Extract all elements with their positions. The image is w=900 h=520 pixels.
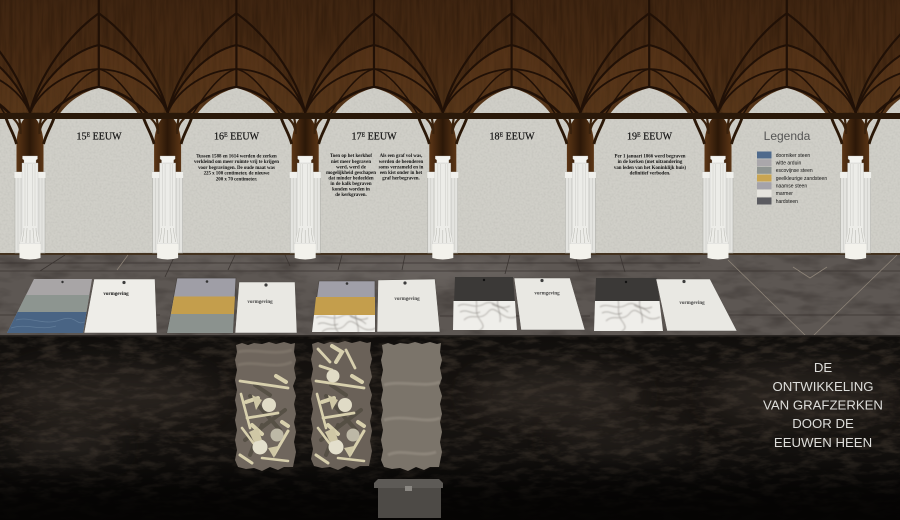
heading: 17e eeuw: E	[361, 132, 365, 138]
text: 17e eeuw left column: dat minder bedeelden	[328, 176, 374, 181]
design sheet 4: vormgeving	[534, 292, 560, 296]
text: 19e eeuw: van leden van het Koninklijk huis)	[614, 166, 686, 171]
legend: hardsteen	[776, 199, 798, 205]
gravestone 4	[453, 277, 518, 332]
soil	[0, 335, 900, 520]
text: 17e eeuw left column: mogelijkheid geschapen	[326, 171, 376, 176]
columns	[14, 156, 871, 260]
gravestone 3	[312, 280, 376, 332]
title: VAN GRAFZERKEN	[763, 398, 883, 412]
gravestone 5	[594, 278, 663, 333]
heading: 17e eeuw: 17	[351, 132, 361, 142]
text: 17e eeuw left column: in de kalk begraven	[330, 182, 372, 187]
wooden vaulted ceiling	[0, 0, 900, 114]
wall background	[0, 80, 900, 255]
heading: 19e eeuw: E	[637, 132, 641, 138]
text: 16e eeuw: Tussen 1588 en 1614 werden de zerken	[196, 154, 277, 160]
roof beam	[0, 113, 900, 119]
text: 16e eeuw: voor begravingen. De oude maat was	[198, 166, 275, 171]
heading: 16e eeuw: 16	[214, 132, 224, 142]
design sheet 2: vormgeving	[247, 300, 273, 305]
text: 16e eeuw: 200 x 70 centimeter.	[216, 177, 257, 182]
text: 19e eeuw: definitief verboden.	[630, 172, 670, 177]
legend	[757, 129, 827, 205]
text: 17e eeuw right column: soms verzameld en in	[379, 165, 424, 170]
design sheet 5	[656, 279, 737, 331]
text: 17e eeuw right column: graf herbegraven.	[382, 176, 420, 181]
legend: naamse steen	[776, 183, 807, 189]
heading: 17e eeuw: EEUW	[365, 132, 397, 142]
text: 19e eeuw: Per 1 januari 1866 werd begraven	[615, 154, 686, 160]
text: 19e eeuw: in de kerken (met uitzondering	[618, 160, 683, 165]
legend: marmer	[776, 191, 793, 197]
design sheet 1	[84, 279, 157, 333]
title: DE	[814, 360, 832, 375]
legend: doorniker steen	[776, 153, 810, 159]
text: 16e eeuw: verkleind om meer ruimte vrij te krijgen	[194, 160, 279, 165]
text: 17e eeuw right column: Als een graf vol was,	[380, 154, 423, 159]
title: ONTWIKKELING	[772, 379, 874, 394]
heading: 15e eeuw: EEUW	[90, 132, 122, 142]
floor	[0, 253, 900, 337]
title: EEUWEN HEEN	[774, 435, 872, 450]
design sheet 2	[235, 282, 297, 333]
grave 3 filled with soil	[381, 342, 442, 471]
heading: 18e eeuw: 18	[489, 132, 499, 142]
design sheet 3: vormgeving	[394, 297, 420, 302]
text: 17e eeuw left column: werd, werd de	[336, 165, 367, 170]
text: 17e eeuw left column: Toen op het kerkhof	[330, 154, 372, 159]
design sheet 4	[514, 278, 585, 330]
design sheet 3	[377, 279, 440, 332]
text: 17e eeuw left column: de kerkgraven.	[335, 193, 367, 198]
heading: 19e eeuw: EEUW	[641, 132, 673, 142]
legend: witte arduin	[776, 160, 801, 166]
heading: 16e eeuw: E	[224, 132, 228, 138]
grave 1 with bones	[235, 342, 296, 471]
design sheet 1: vormgeving	[103, 292, 129, 297]
legend: geelkleurige zandsteen	[776, 176, 827, 182]
gravestone 2	[167, 278, 236, 333]
ossuary box	[374, 479, 443, 518]
text: 17e eeuw left column: konden worden in	[332, 188, 370, 192]
grave 2 with bones	[311, 341, 372, 470]
piers and brackets	[6, 118, 880, 173]
legend: escovijnse steen	[776, 168, 813, 174]
title: DOOR DE	[792, 416, 854, 431]
legend: Legenda	[764, 129, 811, 143]
wall texture	[0, 88, 900, 253]
text: 17e eeuw right column: werden de beenderen	[379, 160, 424, 165]
text: 17e eeuw left column: niet meer begraven	[331, 160, 371, 165]
heading: 18e eeuw: E	[499, 132, 503, 138]
text: 17e eeuw right column: een kist onder in het	[380, 171, 423, 176]
heading: 16e eeuw: EEUW	[228, 132, 260, 142]
gravestone 1	[7, 279, 92, 333]
text: 16e eeuw: 225 x 100 centimeter, de nieuwe	[204, 172, 270, 177]
design sheet 5: vormgeving	[679, 301, 705, 306]
heading: 19e eeuw: 19	[627, 132, 637, 142]
heading: 15e eeuw: 15	[76, 132, 86, 142]
heading: 18e eeuw: EEUW	[503, 132, 535, 142]
heading: 15e eeuw: E	[86, 132, 90, 138]
